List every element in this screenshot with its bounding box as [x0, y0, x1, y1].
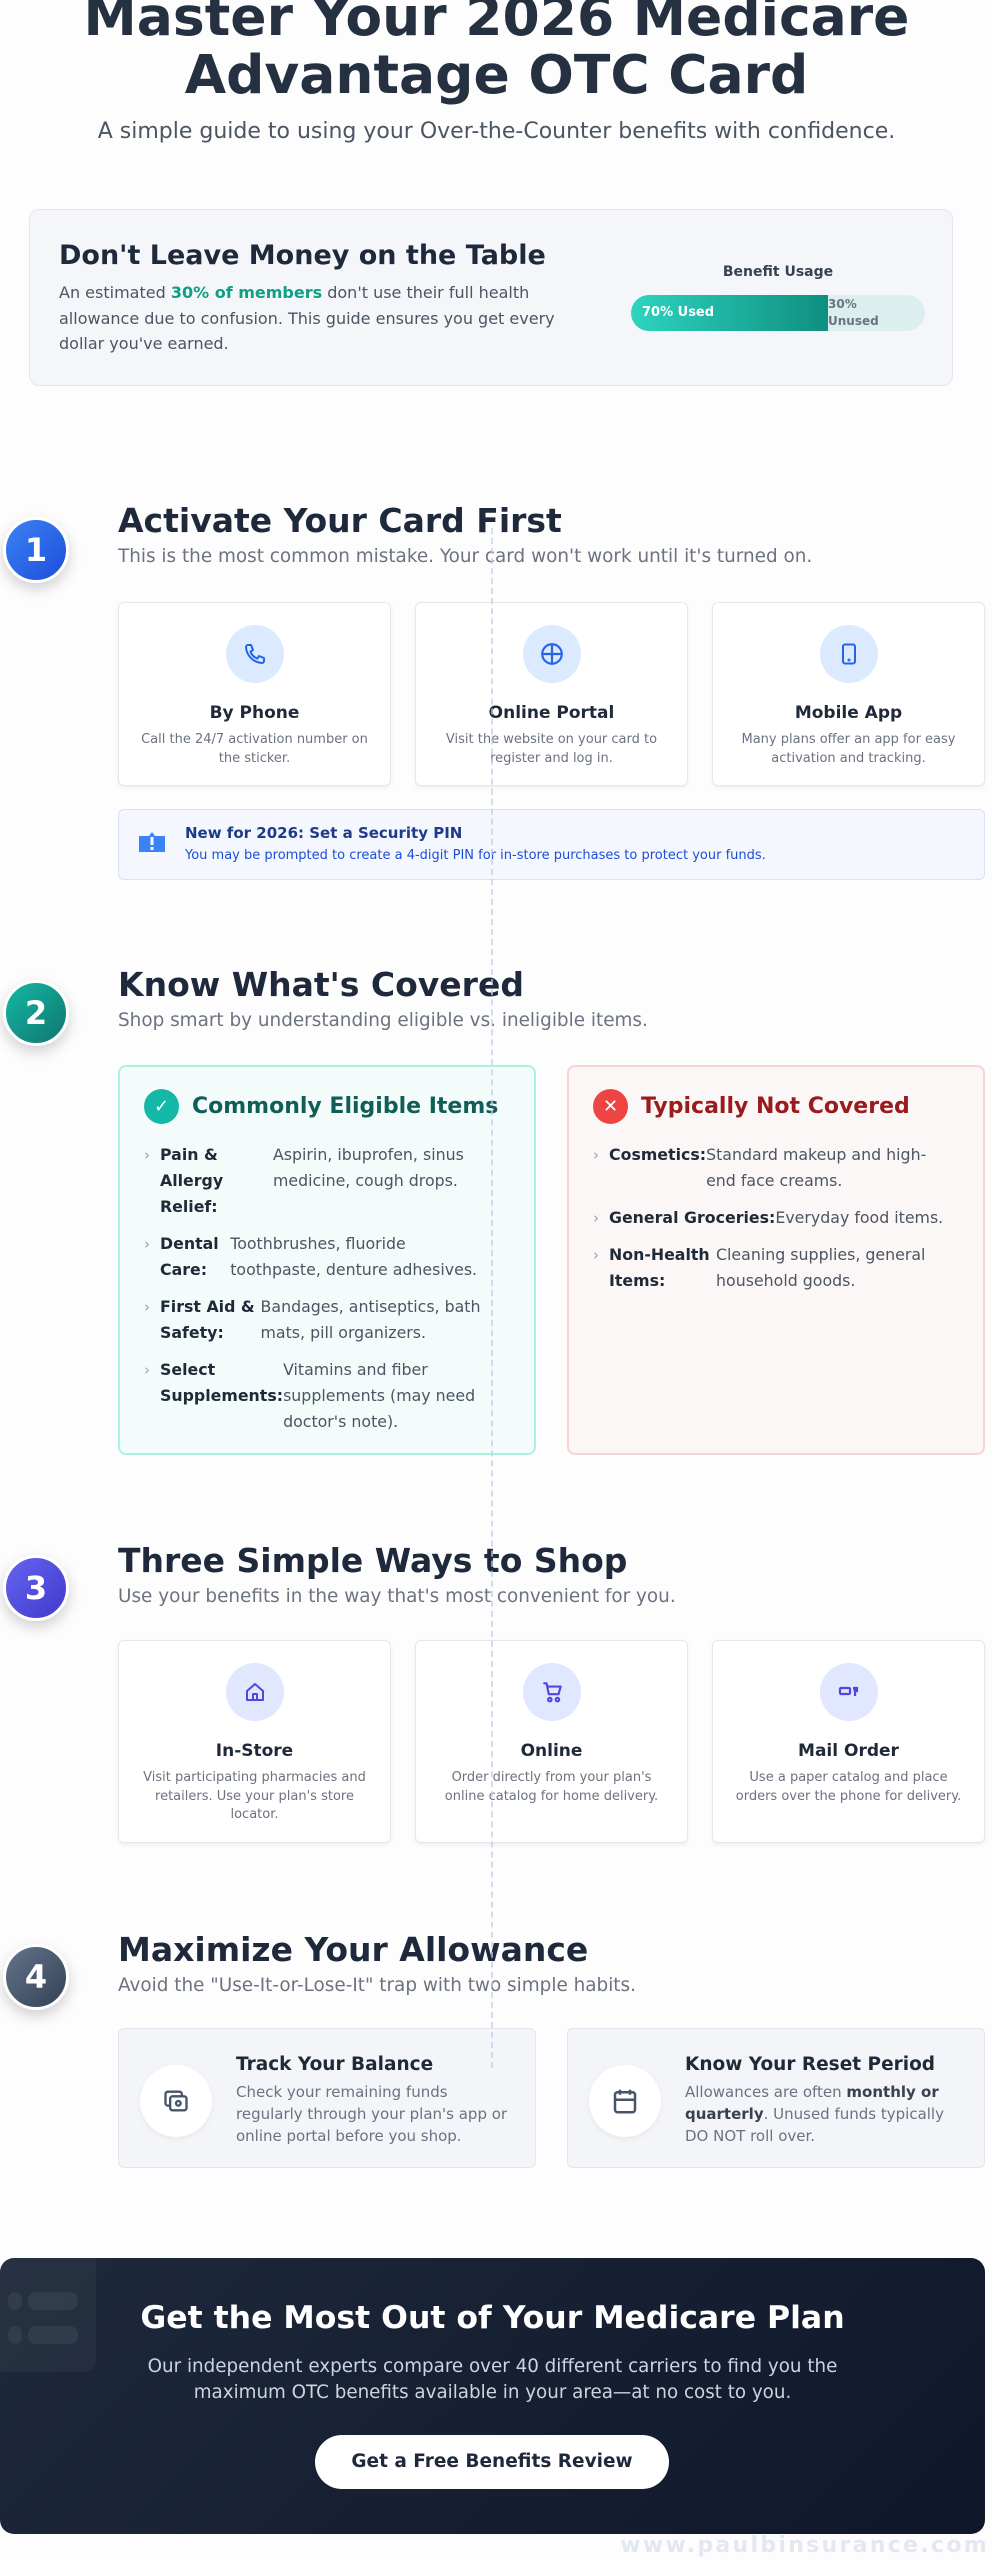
card: track balance: [118, 2028, 536, 2168]
CTA title: Get the Most Out of Your Medicare Plan: [140, 2300, 845, 2336]
section 4 badge: 4: [25, 1958, 47, 1996]
eligible list: Toothbrushes, fluoride toothpaste, denture adhesives.: [230, 1234, 477, 1279]
CTA button: [315, 2435, 669, 2489]
card: reset period: [567, 2028, 985, 2168]
card: track balance: Track Your Balance: [236, 2054, 433, 2075]
eligible heading: ✓: [154, 1096, 169, 1117]
CTA button: Get a Free Benefits Review: [351, 2451, 633, 2472]
eligible list: Bandages, antiseptics, bath mats, pill organizers.: [261, 1297, 481, 1342]
card: by phone: [118, 602, 391, 786]
card: reset period: Know Your Reset Period: [685, 2054, 935, 2075]
section 1 badge: 1: [25, 531, 47, 569]
eligible heading: [144, 1089, 498, 1124]
card: mobile app: Mobile App: [795, 703, 902, 723]
chart: benefit usage bar: [631, 264, 925, 331]
card: mail order: Use a paper catalog and place orders over the phone for delivery.: [736, 1770, 961, 1804]
card: online portal: Visit the website on your card to register and log in.: [446, 732, 657, 766]
icon: mail: [820, 1663, 878, 1721]
eligible list: Select Supplements:: [160, 1360, 283, 1405]
eligible list: Pain & Allergy Relief:: [160, 1145, 223, 1216]
card: in-store: Visit participating pharmacies and retailers. Use your plan's store locator.: [143, 1770, 366, 1822]
icon: phone: [226, 625, 284, 683]
card: online: Order directly from your plan's online catalog for home delivery.: [445, 1770, 658, 1804]
card: mobile app: [712, 602, 985, 786]
section 3 badge: 3: [25, 1569, 47, 1607]
section 4 subtitle: Avoid the "Use-It-or-Lose-It" trap with two simple habits.: [118, 1975, 636, 1996]
card: mobile app: Many plans offer an app for easy activation and tracking.: [742, 732, 956, 766]
section 3 subtitle: Use your benefits in the way that's most convenient for you.: [118, 1586, 676, 1607]
section 4 badge: [3, 1944, 69, 2010]
callout: security PIN: [118, 809, 985, 880]
eligible heading: Commonly Eligible Items: [192, 1094, 498, 1119]
card: mail order: [712, 1640, 985, 1843]
section 3 heading: Three Simple Ways to Shop: [118, 1541, 627, 1580]
decorative grid: [0, 2258, 96, 2372]
card: track balance: Check your remaining funds regularly through your plan's app or online portal before you shop.: [236, 2083, 507, 2145]
title: Advantage OTC Card: [185, 43, 808, 106]
icon: house: [226, 1663, 284, 1721]
panel: not covered: [567, 1065, 985, 1455]
card: by phone: Call the 24/7 activation number on the sticker.: [141, 732, 368, 766]
icon: phone device: [820, 625, 878, 683]
section 1 badge: [3, 517, 69, 583]
icon: calendar: [589, 2065, 661, 2137]
section 2 badge: 2: [25, 994, 47, 1032]
section 2 subtitle: Shop smart by understanding eligible vs. ineligible items.: [118, 1010, 648, 1031]
not covered list: [594, 1145, 943, 1290]
not covered list: Cleaning supplies, general household goods.: [716, 1245, 925, 1290]
not covered list: Non-Health Items:: [609, 1245, 710, 1290]
card: by phone: By Phone: [210, 703, 299, 723]
not covered heading: Typically Not Covered: [641, 1094, 910, 1119]
eligible list: First Aid & Safety:: [160, 1297, 255, 1342]
not covered heading: ✕: [603, 1096, 618, 1117]
not covered list: Cosmetics:: [609, 1145, 706, 1164]
chart: benefit usage bar: 30%: [828, 297, 857, 311]
title: [84, 0, 909, 106]
panel: don't leave money on the table: [29, 209, 953, 386]
text block: An estimated 30% of members don't use their full health allowance due to confusion. This guide ensures you get every dollar you've earned.: [59, 283, 555, 353]
watermark: www.paulbinsurance.com: [620, 2533, 989, 2558]
icon: money: [140, 2065, 212, 2137]
chart: benefit usage bar: Unused: [828, 314, 879, 328]
not covered list: Everyday food items.: [775, 1208, 943, 1227]
chart: benefit usage bar: 70% Used: [642, 305, 714, 320]
section 2 badge: [3, 980, 69, 1046]
card: online: Online: [521, 1741, 582, 1761]
section 2 heading: Know What's Covered: [118, 965, 524, 1004]
icon: alert: [139, 832, 165, 852]
eligible list: Dental Care:: [160, 1234, 219, 1279]
CTA text: Our independent experts compare over 40 different carriers to find you the maximum OTC benefits available in your area—at no cost to you.: [148, 2356, 837, 2403]
chart: benefit usage bar: Benefit Usage: [723, 264, 833, 280]
section 4 heading: Maximize Your Allowance: [118, 1930, 588, 1969]
section 3 badge: [3, 1555, 69, 1621]
card: reset period: Allowances are often monthly or quarterly. Unused funds typically DO NOT roll over.: [685, 2083, 944, 2145]
callout text: You may be prompted to create a 4-digit PIN for in-store purchases to protect your funds.: [185, 848, 766, 863]
not covered list: General Groceries:: [609, 1208, 775, 1227]
vertical timeline line: [491, 528, 493, 2068]
icon: globe: [522, 625, 580, 683]
not covered heading: [593, 1089, 910, 1124]
card: online portal: Online Portal: [489, 703, 614, 723]
callout title: New for 2026: Set a Security PIN: [185, 824, 462, 842]
eligible list: Vitamins and fiber supplements (may need doctor's note).: [283, 1360, 475, 1431]
not covered list: Standard makeup and high-end face creams.: [706, 1145, 926, 1190]
card: online: [415, 1640, 688, 1843]
eligible list: [145, 1145, 481, 1431]
eligible list: Aspirin, ibuprofen, sinus medicine, cough drops.: [273, 1145, 464, 1190]
heading: Don't Leave Money on the Table: [59, 240, 546, 271]
icon: cart: [522, 1663, 580, 1721]
card: in-store: In-Store: [216, 1741, 293, 1761]
CTA panel: [0, 2258, 985, 2534]
subtitle: A simple guide to using your Over-the-Counter benefits with confidence.: [98, 119, 895, 144]
section 1 subtitle: This is the most common mistake. Your card won't work until it's turned on.: [118, 546, 812, 567]
card: online portal: [415, 602, 688, 786]
panel: commonly eligible: [118, 1065, 536, 1455]
section 1 heading: Activate Your Card First: [118, 501, 562, 540]
card: mail order: Mail Order: [798, 1741, 899, 1761]
card: in-store: [118, 1640, 391, 1843]
